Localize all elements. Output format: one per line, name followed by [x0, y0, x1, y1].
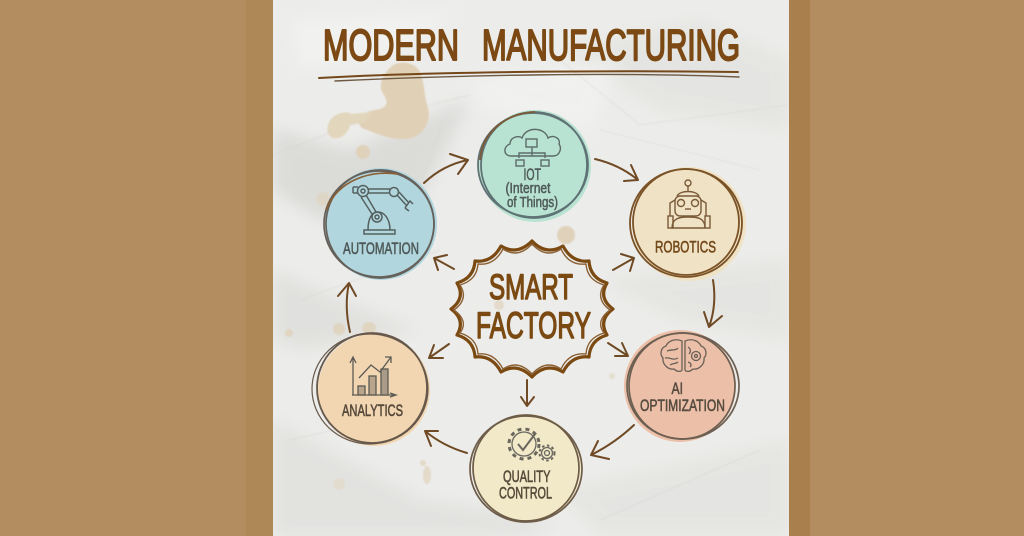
node: AI Optimization [624, 330, 739, 442]
arrow: center to automation [434, 255, 454, 270]
title: MANUFACTURING [482, 21, 740, 70]
label: Smart Factory [476, 268, 591, 346]
arrow: center to AI [608, 343, 628, 356]
icon: cloud network [505, 129, 560, 166]
node: Robotics [630, 167, 746, 281]
label: Smart Factory: SMART [489, 268, 573, 307]
label: Quality Control [499, 468, 552, 503]
arrow: center to robotics [613, 254, 634, 271]
node: Automation [324, 168, 437, 280]
label: Smart Factory: FACTORY [476, 305, 591, 346]
arrow: AI to quality [591, 425, 634, 459]
label: Quality Control: CONTROL [499, 485, 552, 503]
icon: brain [661, 340, 706, 371]
label: Robotics: ROBOTICS [655, 238, 716, 256]
arrows: cycle between nodes [338, 154, 722, 459]
arrow: analytics to automation [338, 283, 356, 332]
icon: robot arm [353, 186, 413, 234]
label: IoT: of Things) [507, 194, 558, 211]
icon: bar chart [350, 357, 396, 397]
title [323, 21, 740, 70]
icon: gears with check [509, 429, 554, 460]
icon: robot [668, 180, 710, 228]
panel: crumpled paper sheet [273, 0, 789, 536]
label: AI Optimization: OPTIMIZATION [640, 396, 725, 415]
coffee stains [285, 63, 615, 490]
title underline [319, 71, 739, 81]
arrow: quality to analytics [425, 431, 467, 453]
label: IoT [506, 165, 558, 211]
arrow: IoT to robotics [595, 159, 638, 181]
arrow: automation to IoT [424, 154, 468, 183]
node: Analytics [312, 333, 430, 446]
node: Quality Control [470, 414, 582, 522]
node: IoT [478, 110, 591, 222]
label: Automation: AUTOMATION [343, 239, 419, 258]
label: AI Optimization: AI [672, 379, 683, 398]
arrow: center to analytics [429, 344, 449, 358]
arrow: center to quality [521, 380, 534, 406]
label: Analytics: ANALYTICS [342, 401, 403, 420]
label: Quality Control: QUALITY [503, 468, 550, 486]
label: AI Optimization [640, 379, 725, 415]
label: IoT: (Internet [506, 180, 551, 197]
center: Smart Factory badge [451, 241, 613, 377]
label: IoT: IOT [524, 165, 541, 184]
arrow: robotics to AI [704, 280, 722, 327]
title: MODERN [323, 21, 459, 70]
